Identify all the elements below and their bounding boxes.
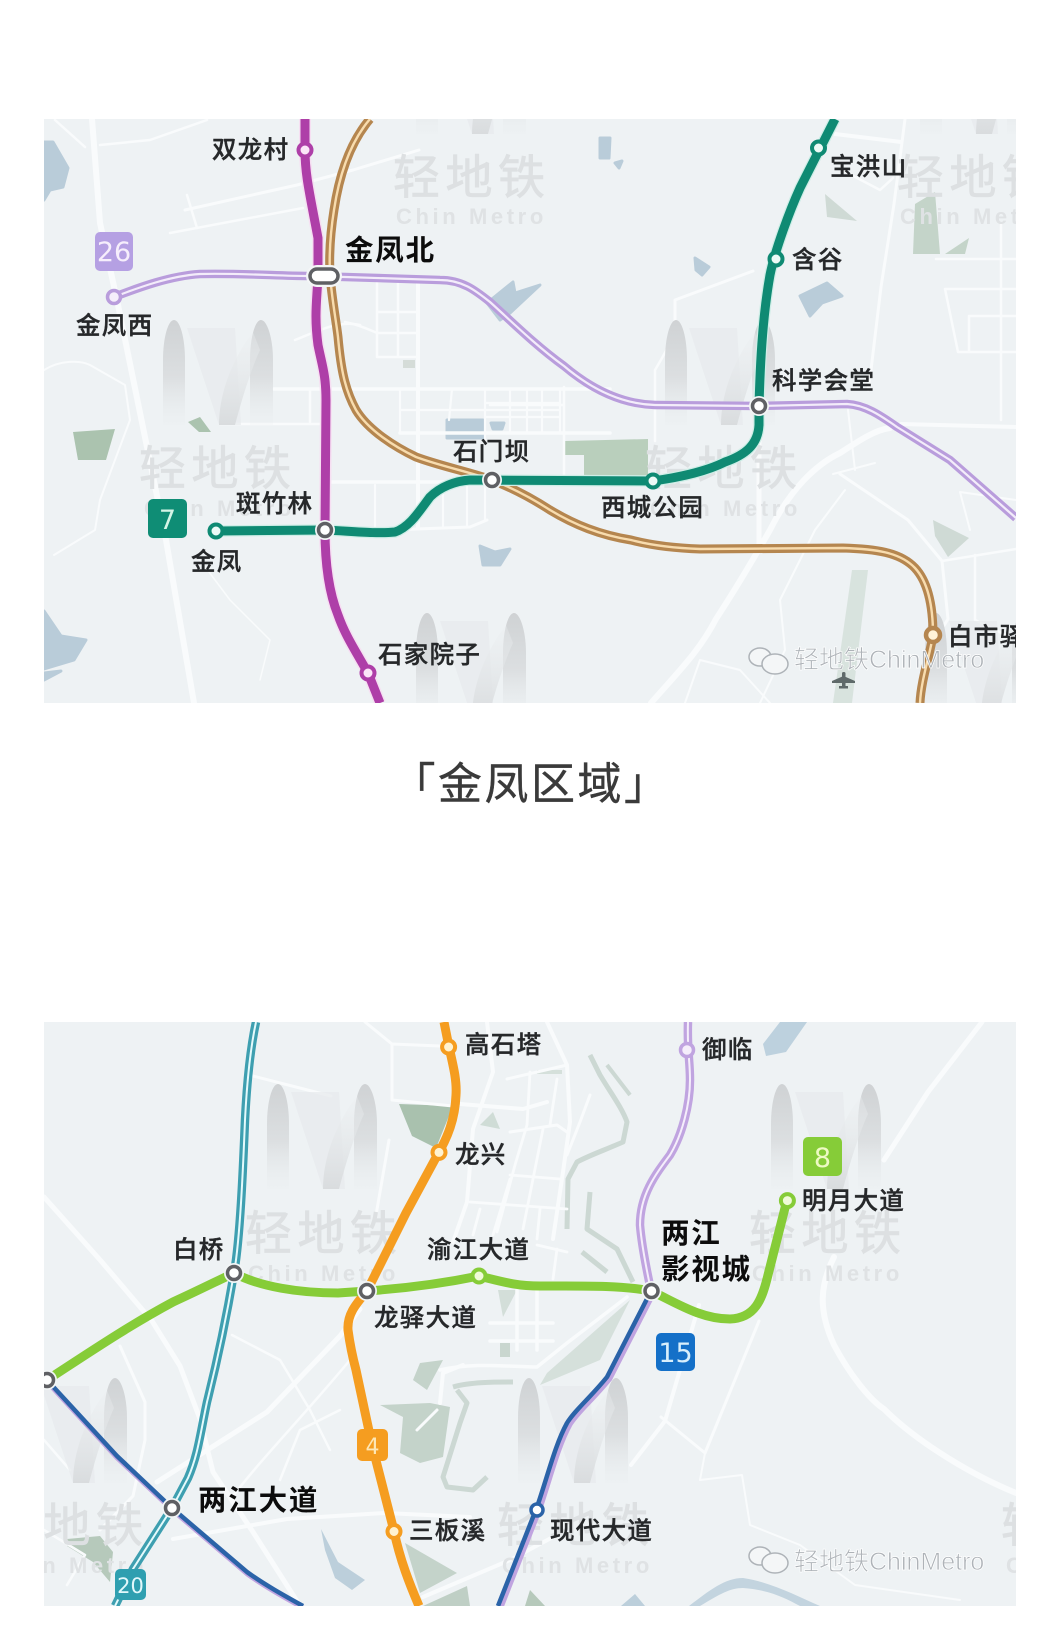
station labels: Liangjiang map: 两江大道 [198, 1485, 319, 1517]
watermark text: 轻地铁 [139, 442, 296, 495]
line 15 blue [47, 1291, 651, 1606]
station labels: Jinfeng map: 含谷 [792, 246, 844, 274]
stations: Jinfeng map [108, 142, 940, 680]
badge: line 20 [115, 1569, 146, 1600]
line 26 purple [114, 274, 1016, 518]
watermark text: Chin Metro [396, 204, 547, 229]
watermark text [44, 1210, 1016, 1573]
green areas [73, 192, 969, 703]
station labels: Liangjiang map: 龙兴 [455, 1141, 507, 1169]
road network [44, 119, 1016, 703]
road network [44, 1022, 1016, 1606]
station labels: Jinfeng map: 金凤西 [76, 312, 153, 340]
watermark text: 轻地铁 [749, 1207, 906, 1260]
badge: line 8: 8 [814, 1143, 831, 1174]
station labels: Liangjiang map: 明月大道 [802, 1187, 905, 1215]
station labels: Jinfeng map: 石门坝 [453, 438, 530, 466]
badge: line 26: 26 [97, 237, 131, 268]
station labels: Jinfeng map: 西城公园 [601, 494, 704, 522]
line magenta [305, 119, 380, 703]
station labels: Liangjiang map: 白桥 [173, 1236, 225, 1264]
watermark M logos [17, 1084, 881, 1483]
station labels: Liangjiang map: 三板溪 [409, 1517, 486, 1545]
station labels: Liangjiang map: 两江 [661, 1218, 722, 1250]
station labels: Jinfeng map: 金凤 [191, 548, 243, 576]
station labels: Jinfeng map: 石家院子 [378, 641, 481, 669]
watermark text: 轻地铁 [393, 151, 550, 204]
line 26 purple section [47, 1022, 690, 1608]
station labels: Jinfeng map [76, 136, 1025, 669]
station labels: Jinfeng map: 双龙村 [212, 136, 289, 164]
line 19 orange-brown [330, 119, 933, 703]
badge: line 20: 20 [117, 1574, 144, 1598]
watermark text: Chin Metro [900, 204, 1051, 229]
river ribbons [443, 1055, 633, 1490]
station labels: Jinfeng map: 白市驿 [948, 623, 1025, 651]
water bodies [44, 138, 842, 680]
water bodies [321, 1022, 820, 1606]
stations: Liangjiang map [37, 1040, 794, 1538]
station labels: Liangjiang map: 御临 [702, 1036, 754, 1064]
badge: line 4 [357, 1429, 388, 1461]
watermark text: Chin Metro [752, 1261, 903, 1286]
badge: line 7 [148, 499, 187, 538]
watermark text: 轻地铁 [645, 442, 802, 495]
badge: line 7: 7 [159, 505, 176, 536]
station labels: Jinfeng map: 斑竹林 [236, 490, 313, 518]
badge: line 15: 15 [658, 1338, 693, 1369]
station labels: Liangjiang map: 现代大道 [550, 1517, 653, 1545]
station labels: Liangjiang map: 渝江大道 [427, 1236, 530, 1264]
badge: line 8 [803, 1137, 842, 1176]
title: Jinfeng area: 「金凤区域」 [392, 760, 670, 809]
wechat watermark: 轻地铁ChinMetro [794, 646, 984, 674]
green areas [67, 1070, 630, 1606]
line 7 green [216, 119, 835, 533]
station labels: Liangjiang map: 龙驿大道 [374, 1304, 477, 1332]
watermark text: Chin Metro [144, 496, 295, 521]
line 4 orange [348, 1022, 456, 1606]
station labels: Liangjiang map: 高石塔 [465, 1031, 542, 1059]
station labels: Liangjiang map: 影视城 [661, 1254, 752, 1286]
badge: line 4: 4 [366, 1435, 380, 1460]
watermark text: Chin Metro [248, 1261, 399, 1286]
watermark text: 轻地铁 [497, 1499, 654, 1552]
map panel: Jinfeng area [44, 119, 1016, 703]
station labels: Jinfeng map: 金凤北 [345, 235, 436, 267]
watermark text: 轻地铁 [245, 1207, 402, 1260]
station labels: Jinfeng map: 宝洪山 [830, 153, 907, 181]
watermark text: Chin Metro [0, 1553, 147, 1578]
icon: airport plane [832, 672, 855, 688]
watermark M logos [119, 119, 1016, 703]
station labels: Liangjiang map [173, 1031, 905, 1545]
watermark text [139, 151, 1054, 521]
station labels: Jinfeng map: 科学会堂 [772, 367, 875, 395]
watermark text: 轻地铁 [897, 151, 1054, 204]
line 20 teal [115, 1022, 256, 1606]
watermark text: Chin Metro [650, 496, 801, 521]
line 8 light green [47, 1200, 787, 1380]
watermark text: Chin Metro [502, 1553, 653, 1578]
wechat watermark: 轻地铁ChinMetro [794, 1548, 984, 1576]
map panel: Liangjiang area [0, 1022, 1059, 1608]
